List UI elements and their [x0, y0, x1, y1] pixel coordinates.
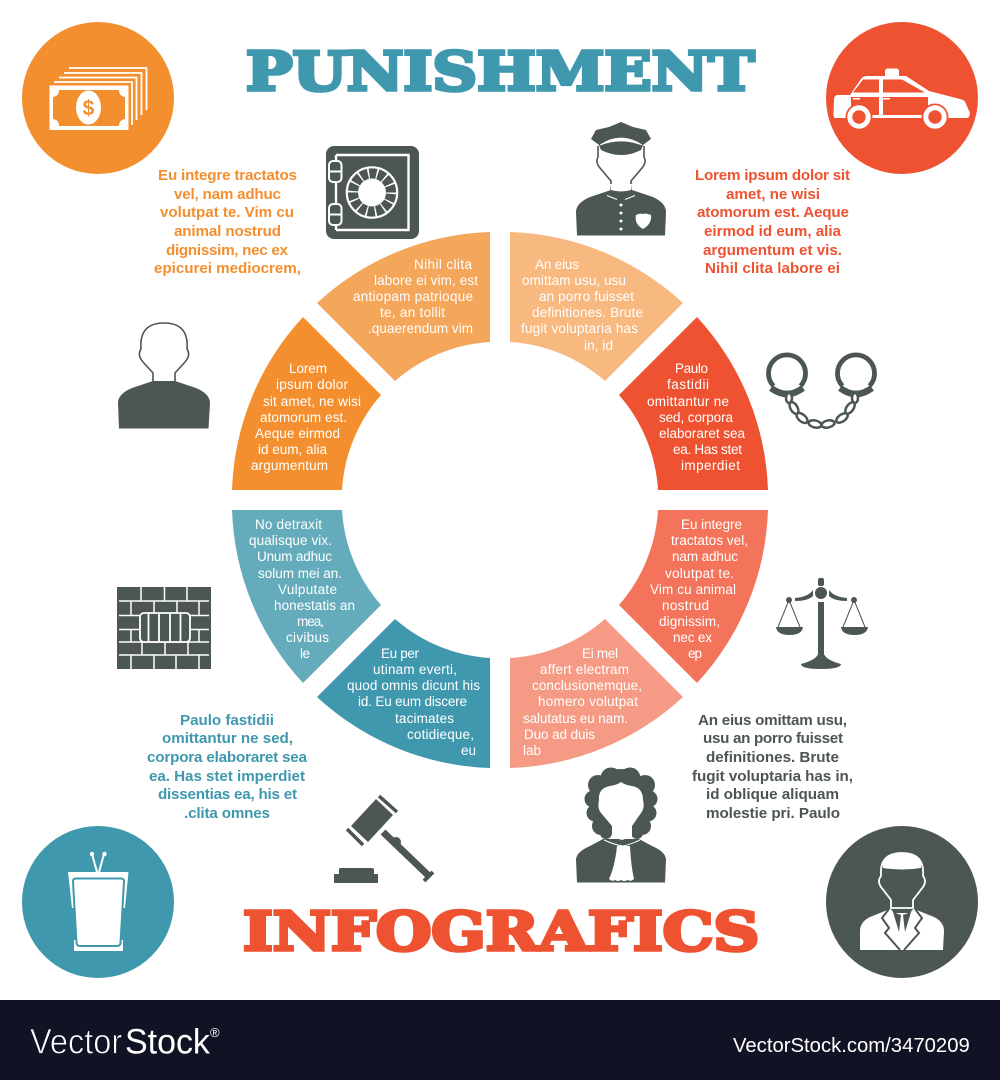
segment text: Nihil clita: te, an tollit	[380, 305, 445, 320]
segment text: Nihil clita	[353, 257, 478, 336]
text block: red callout: argumentum et vis.	[703, 242, 842, 259]
segment: top right upper	[510, 232, 683, 381]
segment text: Eu integre: tractatos vel,	[671, 533, 748, 548]
text block: teal callout	[147, 712, 308, 822]
text block: orange callout: epicurei mediocrem,	[154, 260, 301, 277]
segment text: Nihil clita: labore ei vim, est	[374, 273, 478, 288]
text block: red callout: Nihil clita labore ei	[705, 260, 840, 277]
text block: orange callout: animal nostrud	[174, 223, 281, 240]
text block: teal callout: corpora elaboraret sea	[147, 749, 308, 766]
text block: grey callout: definitiones. Brute	[706, 749, 839, 766]
icon: money circle: $	[83, 97, 95, 120]
segment text: No detraxit	[249, 517, 355, 661]
segment text: Paulo fastidii	[647, 361, 745, 473]
segment text: No detraxit: qualisque vix.	[249, 533, 332, 548]
segment text: Ei mel: conclusionemque,	[532, 678, 642, 693]
segment text: Eu per	[347, 646, 480, 758]
icon: handcuffs	[768, 355, 875, 429]
text block: grey callout: An eius omittam usu,	[698, 712, 847, 729]
segment text: Eu per: eu	[461, 743, 476, 758]
text block: orange callout	[154, 167, 301, 277]
segment: bottom right upper	[619, 510, 768, 683]
text block: grey callout: id oblique aliquam	[706, 786, 839, 803]
text block: red callout	[695, 167, 850, 277]
segment text: Nihil clita: Nihil clita	[414, 257, 472, 272]
icon: prison wall	[117, 587, 211, 669]
text block: grey callout: usu an porro fuisset	[703, 730, 843, 747]
segment text: Ei mel: affert electram	[540, 662, 629, 677]
segment text: Eu per: id. Eu eum discere	[358, 694, 467, 709]
text block: teal callout: ea. Has stet imperdiet	[149, 768, 305, 785]
segment text: Paulo fastidii: fastidii	[667, 377, 709, 392]
segment text: Paulo fastidii: elaboraret sea	[659, 426, 745, 441]
text block: orange callout: vel, nam adhuc	[174, 186, 281, 203]
segment text: No detraxit: honestatis an	[274, 598, 355, 613]
footer logo: Vector	[30, 1022, 122, 1062]
segment text: Lorem ipsum: atomorum est.	[260, 410, 347, 425]
footer logo	[30, 1022, 220, 1062]
segment: top right lower	[619, 317, 768, 490]
icon: police car circle	[826, 22, 978, 174]
icon: police officer	[576, 122, 666, 236]
segment text: Ei mel: homero volutpat	[538, 694, 638, 709]
segment text: Paulo fastidii: Paulo	[675, 361, 708, 376]
segment text: Ei mel	[523, 646, 642, 758]
text block: orange callout: volutpat te. Vim cu	[160, 204, 294, 221]
segment: bottom right lower	[510, 619, 683, 768]
segment: bottom left upper	[232, 510, 381, 683]
text block: grey callout: fugit voluptaria has in,	[692, 768, 853, 785]
segment text: No detraxit: solum mei an.	[258, 566, 342, 581]
icon: money circle	[22, 22, 174, 174]
segment text: An eius: omittam usu, usu	[522, 273, 626, 288]
footer logo: Stock	[125, 1023, 211, 1062]
text block: teal callout: dissentias ea, his et	[158, 786, 297, 803]
icon: businessman circle	[826, 826, 978, 978]
footer logo: ®	[210, 1025, 220, 1040]
segment text: Lorem ipsum: argumentum	[251, 458, 328, 473]
text block: grey callout	[692, 712, 853, 822]
segment text: Eu per: utinam everti,	[373, 662, 457, 677]
icon: judge	[576, 768, 666, 882]
segment text: Eu integre: Eu integre	[681, 517, 742, 532]
segment text: No detraxit: Vulputate	[278, 582, 337, 597]
segment text: Eu per: Eu per	[381, 646, 420, 661]
segment text: Paulo fastidii: imperdiet	[681, 458, 740, 473]
segment text: Eu integre: nostrud	[662, 598, 709, 613]
segment: bottom left lower	[317, 619, 490, 768]
title: PUNISHMENT: PUNISHMENT	[246, 40, 755, 103]
segment text: Eu integre: Vim cu animal	[650, 582, 736, 597]
segment text: Eu integre: ep	[688, 646, 702, 661]
segment text: An eius: in, id	[584, 338, 613, 353]
segment text: Eu integre: dignissim,	[659, 614, 720, 629]
text block: orange callout: dignissim, nec ex	[166, 242, 289, 259]
segment text: Ei mel: Ei mel	[582, 646, 618, 661]
segment: top left lower	[232, 317, 381, 490]
donut chart	[232, 232, 768, 768]
icon: gavel	[334, 796, 433, 883]
segment text: Lorem ipsum	[251, 361, 361, 473]
text block: red callout: eirmod id eum, alia	[704, 223, 842, 240]
icon: safe	[326, 146, 419, 239]
segment text: Eu integre: volutpat te.	[665, 566, 734, 581]
text block: teal callout: .clita omnes	[184, 805, 270, 822]
segment text: Lorem ipsum: Aeque eirmod	[255, 426, 340, 441]
segment text: Eu per: quod omnis dicunt his	[347, 678, 480, 693]
segment: top left upper	[317, 232, 490, 381]
segment text: Paulo fastidii: sed, corpora	[659, 410, 733, 425]
segment text: Nihil clita: .quaerendum vim	[368, 321, 473, 336]
text block: grey callout: molestie pri. Paulo	[706, 805, 840, 822]
text block: red callout: amet, ne wisi	[726, 186, 820, 203]
segment text: Eu per: cotidieque,	[407, 727, 474, 742]
segment text: Paulo fastidii: omittantur ne	[647, 394, 729, 409]
segment text: Nihil clita: antiopam patrioque	[353, 289, 473, 304]
icon: lectern circle	[22, 826, 174, 978]
segment text: An eius: An eius	[535, 257, 579, 272]
text block: teal callout: omittantur ne sed,	[162, 730, 293, 747]
segment text: An eius: definitiones. Brute	[532, 305, 643, 320]
text block: teal callout: Paulo fastidii	[180, 712, 274, 729]
segment text: Lorem ipsum: Lorem	[289, 361, 327, 376]
segment text: No detraxit: mea,	[297, 614, 324, 629]
segment text: Eu per: tacimates	[395, 711, 454, 726]
footer url: VectorStock.com/3470209	[733, 1035, 970, 1057]
segment text: No detraxit: Unum adhuc	[257, 549, 332, 564]
segment text: No detraxit: civibus	[286, 630, 329, 645]
segment text: An eius: an porro fuisset	[539, 289, 634, 304]
text block: orange callout: Eu integre tractatos	[158, 167, 297, 184]
segment text: No detraxit: le	[300, 646, 310, 661]
segment text: Ei mel: Duo ad duis	[524, 727, 595, 742]
segment text: Lorem ipsum: id eum, alia	[258, 442, 327, 457]
segment text: Eu integre	[650, 517, 748, 661]
segment text: Lorem ipsum: sit amet, ne wisi	[263, 394, 361, 409]
segment text: Ei mel: lab	[523, 743, 541, 758]
segment text: Paulo fastidii: ea. Has stet	[673, 442, 742, 457]
segment text: No detraxit: No detraxit	[255, 517, 322, 532]
text block: red callout: atomorum est. Aeque	[697, 204, 849, 221]
segment text: Ei mel: salutatus eu nam.	[523, 711, 628, 726]
footer bar	[0, 1000, 1000, 1080]
segment text: An eius	[521, 257, 643, 353]
segment text: Lorem ipsum: ipsum dolor	[276, 377, 348, 392]
title: INFOGRAFICS: INFOGRAFICS	[243, 900, 759, 963]
icon: person	[118, 323, 210, 428]
segment text: An eius: fugit voluptaria has	[521, 321, 638, 336]
segment text: Eu integre: nec ex	[673, 630, 712, 645]
icon: scales	[776, 578, 868, 669]
text block: red callout: Lorem ipsum dolor sit	[695, 167, 850, 184]
segment text: Eu integre: nam adhuc	[672, 549, 738, 564]
